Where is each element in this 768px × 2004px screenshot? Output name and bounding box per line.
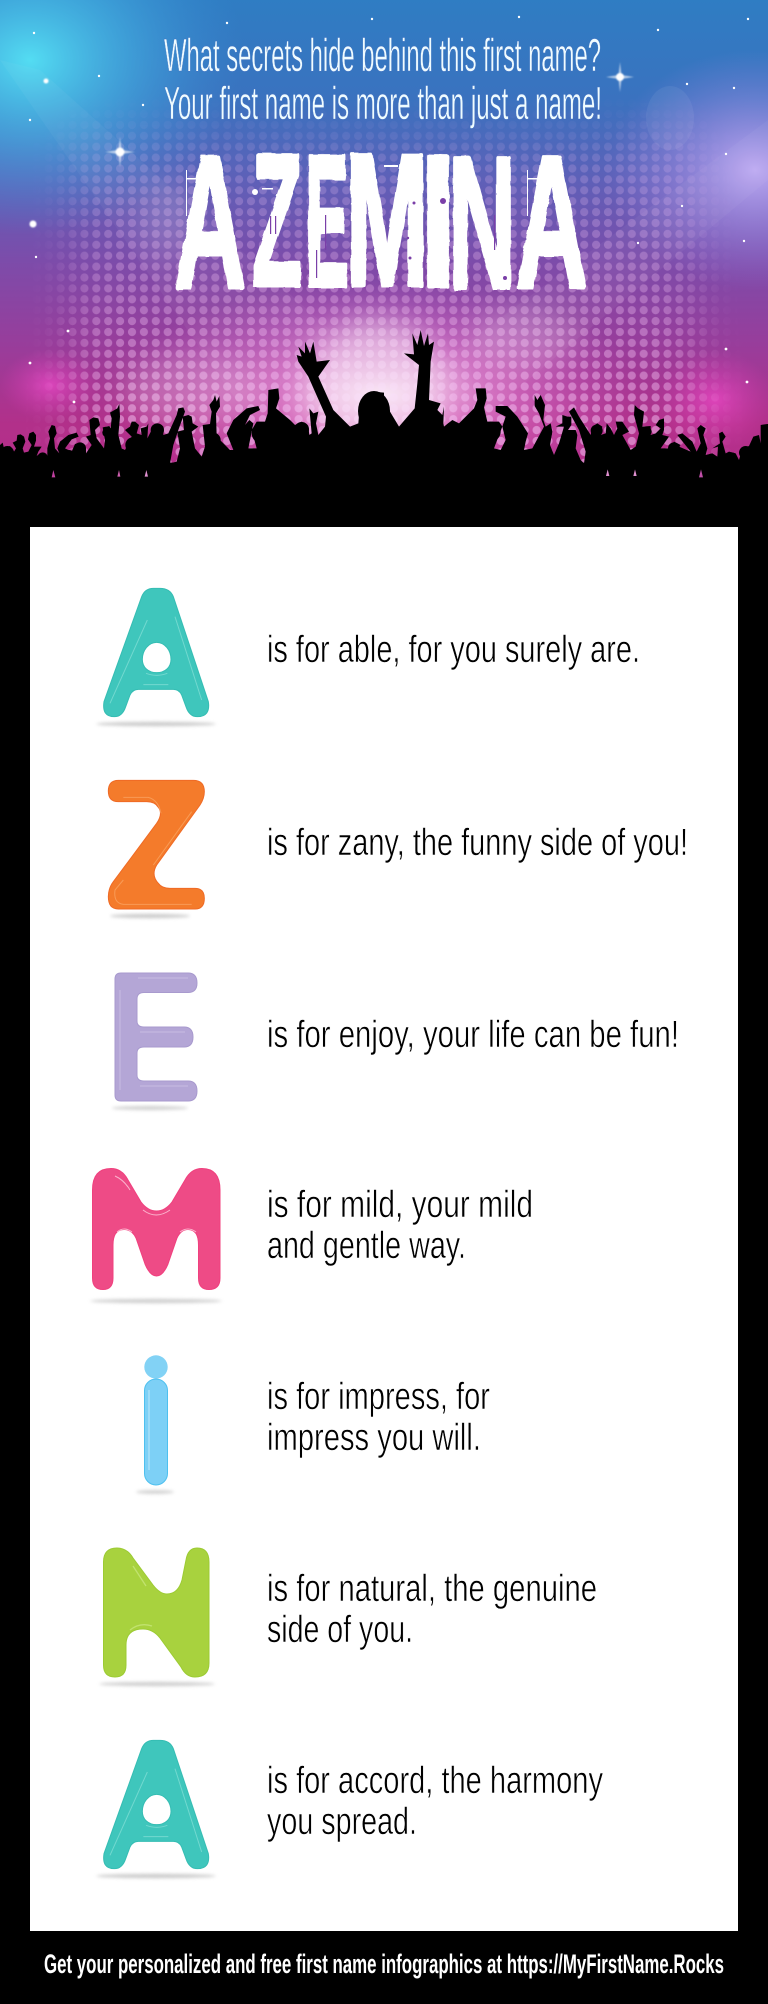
text: I lines: impress you will. [267, 1417, 481, 1459]
icon: letter E [112, 973, 197, 1110]
text: N lines [267, 1568, 597, 1651]
icon: letter I [136, 1355, 174, 1494]
icon: letter A [96, 588, 216, 726]
text: A second lines [267, 1760, 603, 1843]
text: M lines: is for mild, your mild [267, 1184, 533, 1226]
text: A line: is for able, for you surely are. [267, 629, 640, 671]
row: letter E [112, 973, 679, 1110]
text: I lines [267, 1376, 490, 1459]
title: name: A [174, 117, 246, 327]
row: letter I [136, 1355, 490, 1494]
decorative stars [29, 16, 749, 403]
row: letter A [96, 588, 640, 726]
heading: tagline [164, 29, 602, 129]
title: name: A [516, 117, 587, 327]
icon: letter M [90, 1168, 222, 1303]
icon: letter N [99, 1548, 215, 1686]
row: letter A second [96, 1740, 603, 1878]
text: N lines: side of you. [267, 1609, 413, 1651]
text: A second lines: is for accord, the harmony [267, 1760, 603, 1802]
title: name: M [345, 115, 429, 325]
icon: letter A second [96, 1740, 216, 1878]
title: name: E [305, 116, 349, 326]
text: M lines: and gentle way. [267, 1225, 466, 1267]
header background [0, 0, 768, 510]
text: A second lines: you spread. [267, 1801, 417, 1843]
row: letter N [99, 1548, 597, 1686]
text: N lines: is for natural, the genuine [267, 1568, 597, 1610]
panel: letters [30, 527, 738, 1931]
title: name: I [420, 116, 456, 327]
row: letter M [90, 1168, 533, 1303]
text: M lines [267, 1184, 533, 1267]
title: name: N [448, 119, 516, 328]
silhouette: crowd [0, 330, 768, 530]
text: I lines: is for impress, for [267, 1376, 490, 1418]
decorative grunge specks [186, 165, 543, 280]
title: name [174, 115, 587, 328]
row: letter Z [108, 780, 688, 918]
title: name: Z [252, 115, 302, 325]
icon: letter Z [108, 780, 204, 918]
